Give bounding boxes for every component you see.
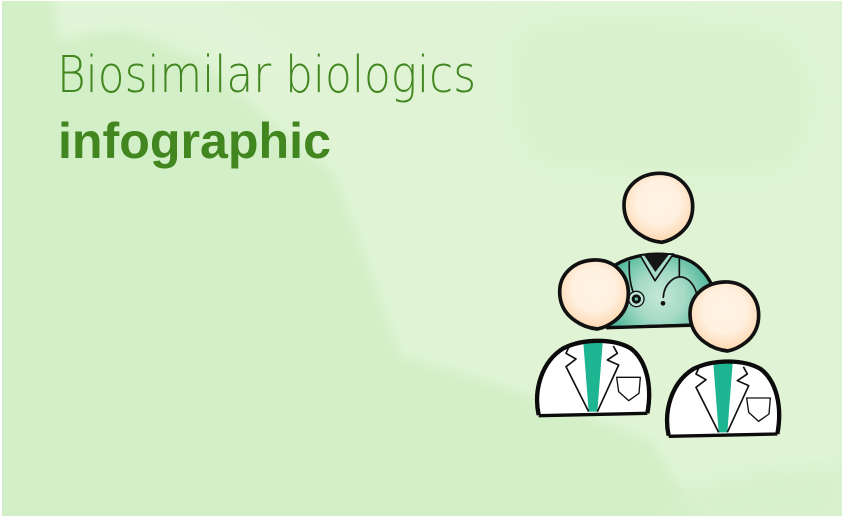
doctor in scrubs: body (607, 254, 713, 328)
left doctor: coat (537, 341, 649, 416)
scrubs collar (640, 254, 673, 281)
doctor group illustration (537, 173, 779, 436)
stethoscope (629, 259, 697, 297)
title (57, 46, 476, 169)
left doctor: head (560, 260, 628, 329)
right doctor: head (690, 282, 759, 351)
title line 1: Biosimilar biologics (57, 46, 476, 105)
title line 2: infographic (58, 113, 331, 169)
doctor in scrubs: head (624, 173, 693, 242)
right doctor: coat (667, 361, 779, 436)
